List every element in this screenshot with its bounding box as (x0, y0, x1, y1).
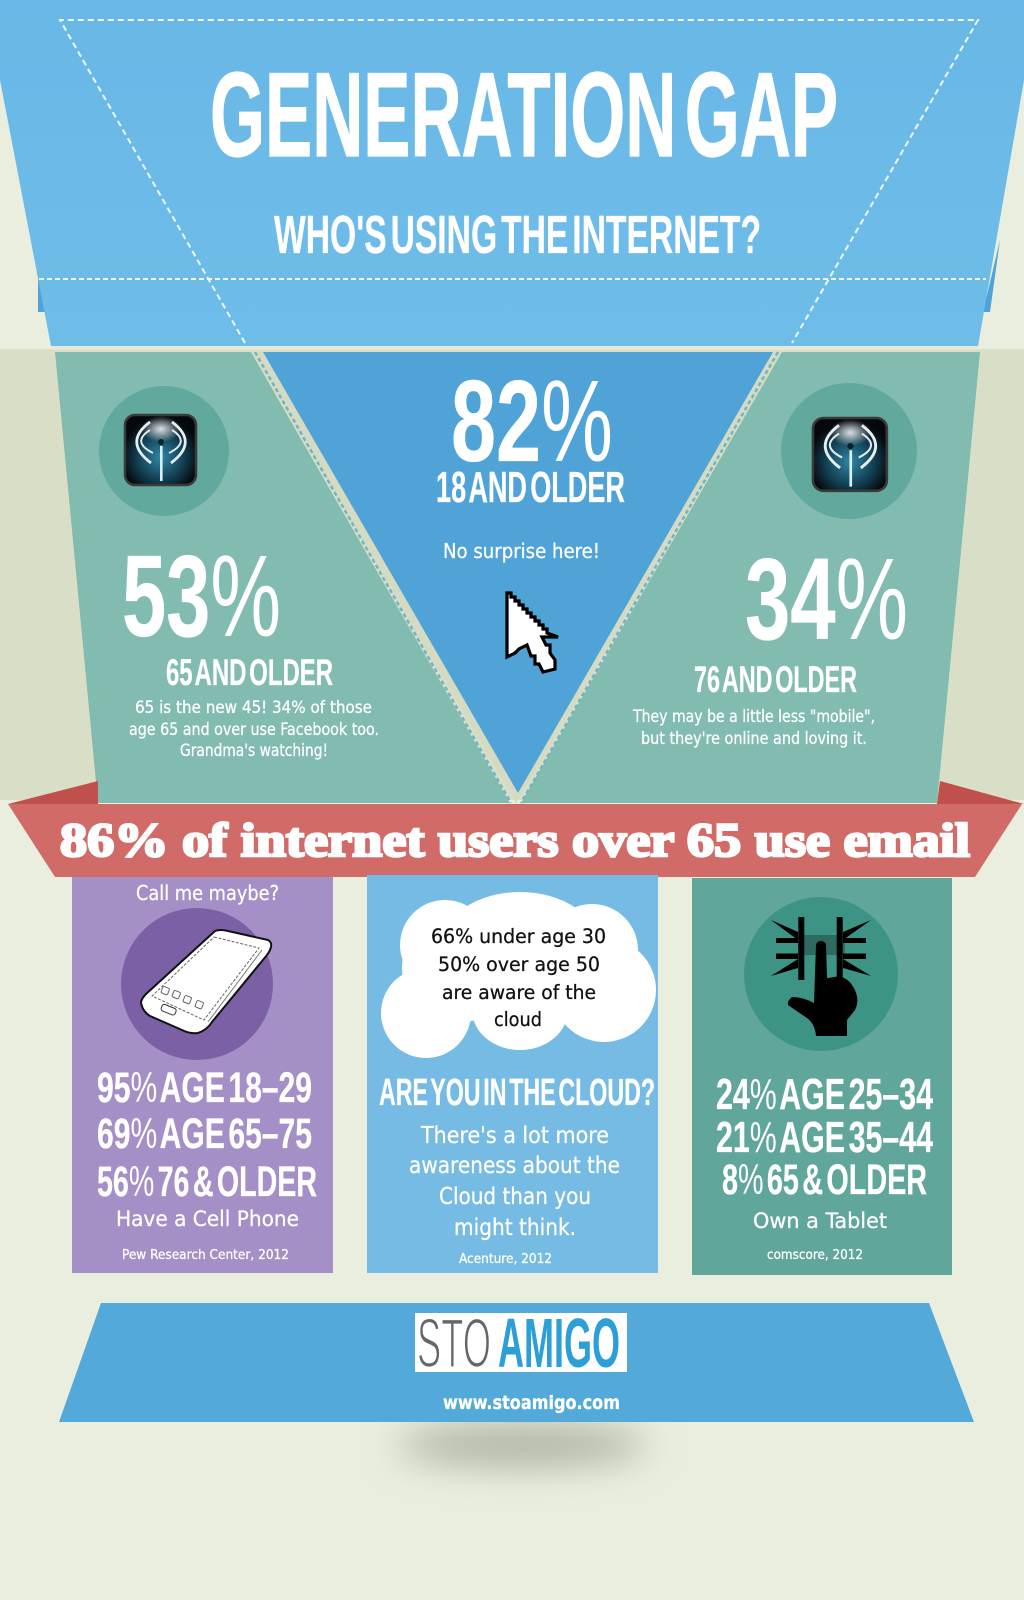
text: cloud awareness: There's a lot more (420, 1121, 609, 1149)
stats: cell phone ages (97, 1064, 317, 1206)
text: mobile note: but they're online and loving it. (641, 729, 867, 748)
panel: header banner (0, 0, 1024, 350)
stats: tablet ages: 21% AGE 35–44 (716, 1113, 933, 1162)
icon: cloud with text: cloud (494, 1008, 542, 1031)
stats: cell phone ages: 56% 76 & OLDER (97, 1158, 317, 1206)
label: 18 and older: 18 AND OLDER (436, 463, 625, 512)
source: pew: Pew Research Center, 2012 (122, 1247, 289, 1263)
stats: tablet ages: 8% 65 & OLDER (722, 1156, 927, 1204)
text: Facebook note: Grandma's watching! (180, 741, 328, 760)
statistic: 34%: 34% (745, 534, 908, 664)
icon: finger tap (744, 897, 898, 1051)
icon: cloud with text: 50% over age 50 (438, 953, 600, 976)
text: mobile note (632, 707, 875, 748)
icon: cloud with text: 66% under age 30 (431, 925, 606, 948)
panel: footer (59, 1303, 974, 1422)
logo: StoAmigo (415, 1304, 627, 1382)
source: acenture: Acenture, 2012 (459, 1251, 552, 1267)
text: call me maybe: Call me maybe? (136, 881, 279, 905)
icon: smartphone (121, 908, 273, 1060)
icon: wifi badge right (781, 383, 917, 519)
stats: cell phone ages: 95% AGE 18–29 (97, 1064, 312, 1112)
icon: cloud with text: are aware of the (442, 981, 596, 1004)
text: no surprise: No surprise here! (443, 539, 600, 563)
icon: cloud with text (381, 892, 656, 1058)
text: have a cell phone: Have a Cell Phone (116, 1207, 299, 1232)
panel: 53% 65 and older (55, 352, 510, 803)
label: 76 and older: 76 AND OLDER (694, 659, 857, 700)
text: mobile note: They may be a little less "mobile", (632, 707, 875, 726)
text: website: www.stoamigo.com (443, 1392, 620, 1414)
logo: StoAmigo: STO (417, 1304, 491, 1382)
heading: are you in the cloud: ARE YOU IN THE CLOUD? (379, 1072, 655, 1114)
banner: red ribbon (8, 781, 1024, 877)
panel: cell phone card (72, 877, 333, 1273)
text: email statistic: 86% of internet users over 65 use email (60, 814, 970, 867)
panel: cloud card (367, 875, 658, 1273)
logo: StoAmigo: AMIGO (498, 1304, 620, 1382)
source: comscore: comscore, 2012 (767, 1247, 863, 1263)
panel: 82% center triangle (251, 352, 782, 803)
text: cloud awareness: awareness about the (409, 1151, 620, 1179)
text: cloud awareness (409, 1121, 620, 1241)
stats: cell phone ages: 69% AGE 65–75 (97, 1110, 312, 1158)
text: cloud awareness: Cloud than you (439, 1182, 591, 1210)
stats: tablet ages (716, 1070, 933, 1204)
icon: mouse cursor (507, 593, 558, 672)
text: own a tablet: Own a Tablet (753, 1209, 887, 1234)
panel: 34% 76 and older (521, 352, 980, 803)
statistic: 53%: 53% (122, 531, 281, 661)
text: cloud awareness: might think. (454, 1213, 576, 1241)
panel: tablet card (692, 878, 952, 1275)
label: 65 and older: 65 AND OLDER (166, 652, 333, 693)
stats: tablet ages: 24% AGE 25–34 (716, 1070, 933, 1119)
icon: wifi badge left (99, 386, 229, 516)
text: Facebook note: age 65 and over use Facebook too. (129, 720, 379, 739)
shadow below footer (397, 1423, 647, 1467)
text: Facebook note (129, 698, 379, 760)
text: Facebook note: 65 is the new 45! 34% of those (135, 698, 372, 717)
statistic: 82%: 82% (451, 356, 613, 486)
